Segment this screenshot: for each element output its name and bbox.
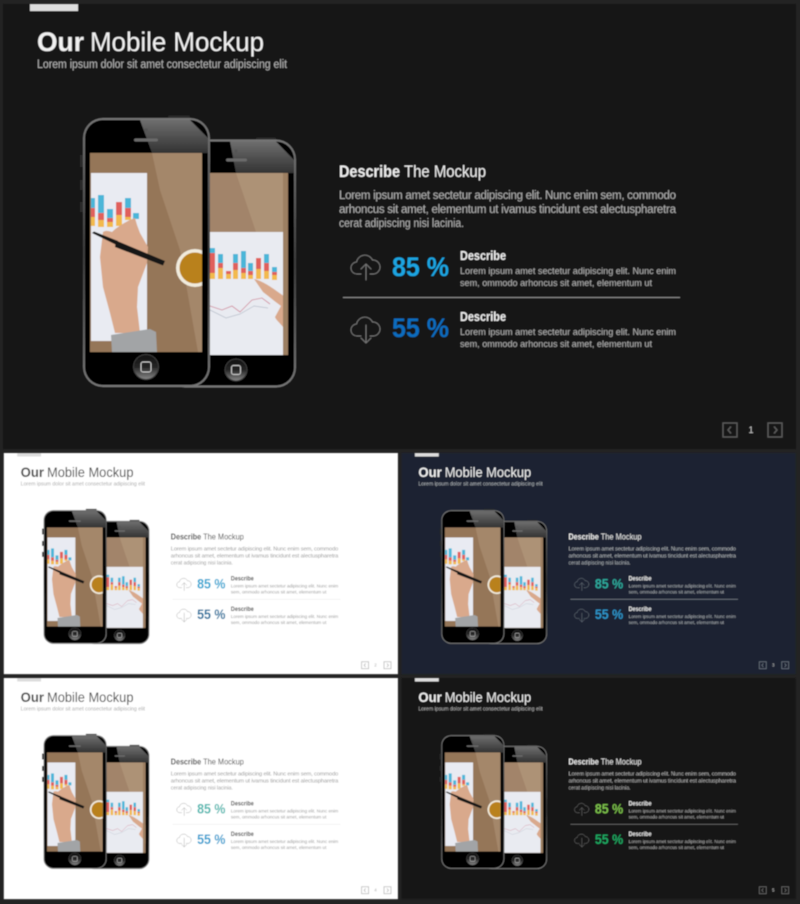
phone mockups (42, 509, 149, 644)
stat: 85 %: 85 % (595, 802, 623, 817)
stat text 1: sem, ommodo arhoncus sit amet, elementum ut (231, 590, 327, 596)
pagination: 2 (374, 663, 377, 668)
stat text 2: Lorem ipsum amet sectetur adipiscing elit. Nunc enim (460, 327, 676, 338)
icon: cloud download (574, 609, 589, 622)
panel: white slide, blue stats (4, 453, 398, 674)
icon: cloud upload (351, 255, 380, 280)
phone mockups (42, 734, 149, 869)
subtitle: Lorem ipsum dolor sit amet consectetur adipiscing elit (21, 481, 145, 487)
stat: 85 %: 85 % (197, 802, 226, 817)
stat text 2 (460, 309, 676, 350)
heading: Describe (171, 531, 201, 541)
stat text 2: Describe (231, 831, 254, 838)
subtitle: Lorem ipsum dolor sit amet consectetur adipiscing elit (418, 706, 543, 712)
stat text 2: sem, ommodo arhoncus sit amet, elementum ut (629, 845, 725, 851)
title: Our (418, 690, 443, 705)
heading: Describe (171, 756, 201, 766)
description: cerat adipiscing nisi lacinia. (339, 218, 464, 230)
stat text 1: Lorem ipsum amet sectetur adipiscing elit. Nunc enim (629, 584, 736, 590)
panel: dark slide, green stats (401, 678, 796, 899)
pagination (759, 887, 789, 894)
heading: Describe (568, 531, 599, 541)
title: Mobile Mockup (90, 27, 264, 57)
stat text 2: sem, ommodo arhoncus sit amet, elementum ut (231, 845, 327, 851)
stat text 1: Lorem ipsum amet sectetur adipiscing elit. Nunc enim (629, 809, 736, 815)
subtitle: Lorem ipsum dolor sit amet consectetur adipiscing elit (418, 481, 543, 487)
description: arhoncus sit amet, elementum ut ivamus tincidunt est alectuspharetra (568, 553, 737, 559)
subtitle: Lorem ipsum dolor sit amet consectetur adipiscing elit (21, 706, 145, 712)
stat text 1 (231, 801, 338, 821)
stat text 2: Lorem ipsum amet sectetur adipiscing elit. Nunc enim (629, 839, 736, 845)
pagination: 1 (748, 425, 754, 435)
subtitle: Lorem ipsum dolor sit amet consectetur adipiscing elit (37, 59, 288, 71)
icon: cloud upload (177, 803, 191, 816)
heading: The Mockup (203, 531, 244, 541)
heading: The Mockup (601, 531, 642, 541)
description: cerat adipiscing nisi lacinia. (171, 785, 233, 791)
panel: white slide, teal stats (4, 678, 398, 899)
pagination (759, 662, 789, 669)
description (568, 546, 737, 566)
stat text 2: Describe (231, 606, 254, 613)
icon: cloud download (177, 834, 191, 847)
pagination (362, 662, 391, 669)
pagination: 5 (772, 888, 775, 893)
stat text 1: Lorem ipsum amet sectetur adipiscing elit. Nunc enim (231, 809, 338, 815)
phone mockups (440, 734, 547, 869)
heading: Describe (339, 162, 400, 181)
icon: cloud download (177, 609, 191, 622)
stat: 55 %: 55 % (197, 607, 226, 622)
stat text 2: sem, ommodo arhoncus sit amet, elementum ut (231, 620, 327, 626)
description: Lorem ipsum amet sectetur adipiscing elit. Nunc enim sem, commodo (171, 546, 338, 552)
stat text 1: Describe (629, 576, 652, 583)
description: Lorem ipsum amet sectetur adipiscing elit. Nunc enim sem, commodo (568, 546, 736, 552)
heading (171, 531, 244, 541)
heading: The Mockup (203, 756, 244, 766)
stat text 1: Describe (231, 801, 254, 808)
heading: The Mockup (404, 162, 486, 181)
accent bar (17, 453, 41, 456)
stat text 1: Lorem ipsum amet sectetur adipiscing elit. Nunc enim (460, 266, 676, 277)
pagination: 4 (374, 888, 377, 893)
stat: 55 %: 55 % (197, 832, 226, 847)
description: cerat adipiscing nisi lacinia. (171, 560, 233, 566)
stat text 1: sem, ommodo arhoncus sit amet, elementum ut (460, 278, 652, 289)
stat: 85 %: 85 % (595, 577, 623, 592)
title: Mobile Mockup (47, 690, 134, 705)
description: Lorem ipsum amet sectetur adipiscing elit. Nunc enim sem, commodo (339, 190, 676, 202)
description (339, 190, 677, 230)
stat: 85 %: 85 % (197, 577, 226, 592)
description: Lorem ipsum amet sectetur adipiscing elit. Nunc enim sem, commodo (568, 771, 736, 777)
stat text 2 (629, 831, 736, 851)
stat text 2 (629, 606, 736, 626)
stat text 1 (231, 576, 338, 596)
description: arhoncus sit amet, elementum ut ivamus tincidunt est alectuspharetra (339, 204, 677, 216)
stat text 1: Describe (460, 248, 506, 263)
stat text 1: Lorem ipsum amet sectetur adipiscing elit. Nunc enim (231, 584, 338, 590)
description (568, 771, 737, 791)
stat: 55 %: 55 % (595, 832, 623, 847)
stat text 2: Describe (460, 309, 506, 324)
description (171, 771, 339, 791)
icon: cloud upload (177, 578, 191, 591)
stat text 1: sem, ommodo arhoncus sit amet, elementum ut (629, 590, 725, 596)
title: Our (37, 27, 84, 57)
title: Our (418, 465, 443, 480)
stat text 2: sem, ommodo arhoncus sit amet, elementum ut (460, 339, 652, 350)
stat text 2: Lorem ipsum amet sectetur adipiscing elit. Nunc enim (231, 614, 338, 620)
stat text 1: Describe (231, 576, 254, 583)
accent bar (30, 4, 78, 11)
accent bar (17, 678, 41, 681)
stat: 85 %: 85 % (392, 252, 449, 282)
stat: 55 %: 55 % (595, 607, 623, 622)
phone mockups (80, 116, 296, 388)
panel: main dark slide (3, 4, 796, 449)
stat text 1: sem, ommodo arhoncus sit amet, elementum ut (629, 815, 725, 821)
icon: cloud upload (574, 803, 589, 816)
pagination: 3 (772, 663, 775, 668)
stat text 2: Describe (629, 606, 652, 613)
icon: cloud download (351, 317, 380, 343)
description: arhoncus sit amet, elementum ut ivamus tincidunt est alectuspharetra (568, 778, 737, 784)
pagination (362, 887, 391, 894)
icon: cloud download (574, 834, 589, 847)
description: cerat adipiscing nisi lacinia. (568, 560, 631, 566)
description (171, 546, 339, 566)
stat text 2 (231, 606, 338, 626)
heading (339, 162, 486, 181)
stat text 1 (629, 801, 736, 821)
stat text 1 (460, 248, 676, 289)
heading: Describe (568, 756, 599, 766)
description: Lorem ipsum amet sectetur adipiscing elit. Nunc enim sem, commodo (171, 771, 338, 777)
stat text 2: sem, ommodo arhoncus sit amet, elementum ut (629, 620, 725, 626)
title: Our (21, 690, 45, 705)
description: cerat adipiscing nisi lacinia. (568, 785, 631, 791)
stat: 55 %: 55 % (392, 313, 449, 343)
description: arhoncus sit amet, elementum ut ivamus tincidunt est alectuspharetra (171, 778, 339, 784)
stat text 2: Lorem ipsum amet sectetur adipiscing elit. Nunc enim (231, 839, 338, 845)
heading: The Mockup (601, 756, 642, 766)
title: Mobile Mockup (445, 690, 531, 705)
heading (568, 531, 642, 541)
pagination (723, 423, 782, 437)
heading (568, 756, 642, 766)
phone mockups (440, 509, 547, 644)
stat text 2 (231, 831, 338, 851)
stat text 2: Describe (629, 831, 652, 838)
stat text 1 (629, 576, 736, 596)
icon: cloud upload (574, 578, 589, 591)
title: Mobile Mockup (445, 465, 531, 480)
stat text 1: Describe (629, 801, 652, 808)
accent bar (415, 453, 439, 456)
stat text 1: sem, ommodo arhoncus sit amet, elementum ut (231, 815, 327, 821)
accent bar (415, 678, 439, 681)
title: Mobile Mockup (47, 465, 134, 480)
title: Our (21, 465, 45, 480)
panel: navy slide, teal stats (401, 453, 796, 674)
heading (171, 756, 244, 766)
stat text 2: Lorem ipsum amet sectetur adipiscing elit. Nunc enim (629, 614, 736, 620)
description: arhoncus sit amet, elementum ut ivamus tincidunt est alectuspharetra (171, 553, 339, 559)
